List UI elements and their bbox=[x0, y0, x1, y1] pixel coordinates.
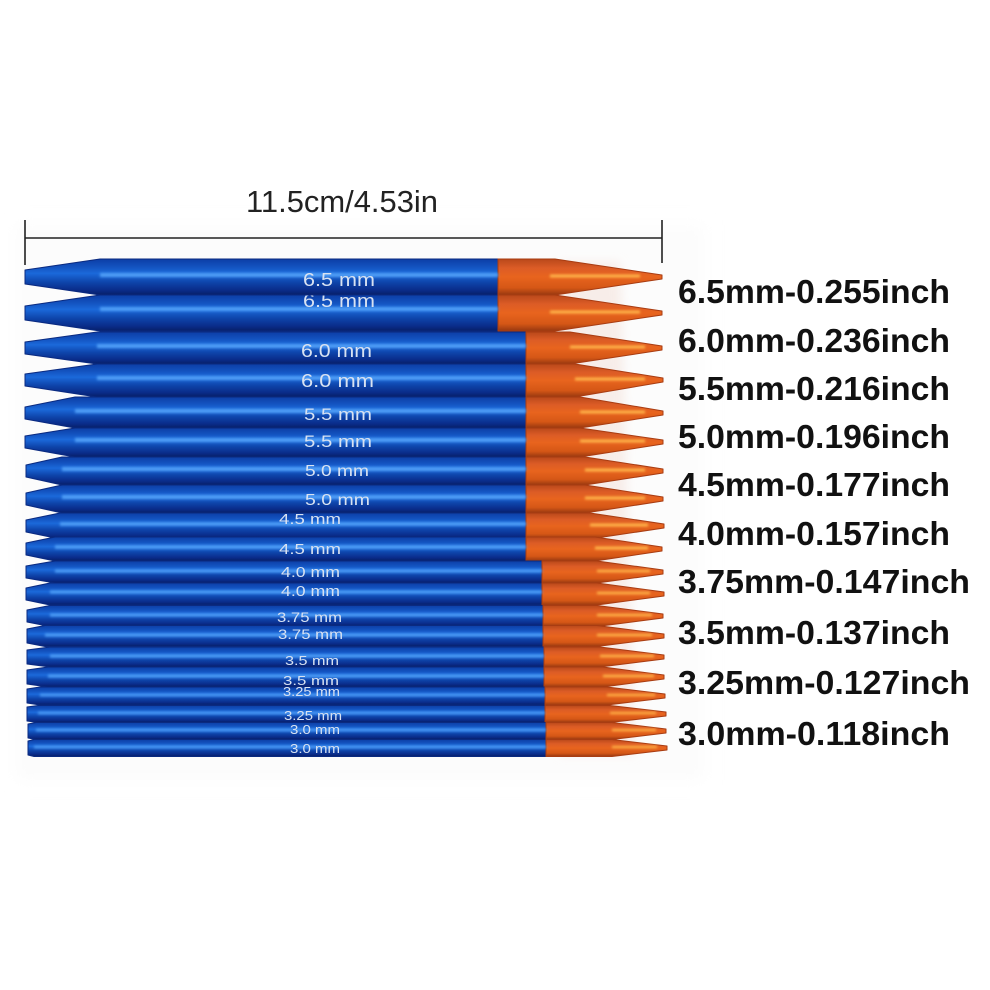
dimension label: 11.5cm/4.53in bbox=[246, 184, 438, 219]
size conversion labels: 3.75mm-0.147inch bbox=[678, 563, 970, 600]
needle group: 3.0 mm pair: 3.0 mm bbox=[290, 723, 340, 737]
needle group: 4.0 mm pair: 4.0 mm bbox=[281, 584, 340, 600]
needle group: 5.5 mm pair bbox=[25, 397, 663, 457]
needle group: 3.5 mm pair bbox=[27, 647, 664, 688]
size conversion labels: 4.5mm-0.177inch bbox=[678, 466, 950, 503]
needle group: 3.75 mm pair: 3.75 mm bbox=[277, 610, 342, 625]
needle group: 3.25 mm pair: 3.25 mm bbox=[283, 684, 340, 699]
needle group: 3.25 mm pair bbox=[27, 684, 666, 723]
size conversion labels: 3.0mm-0.118inch bbox=[678, 715, 950, 752]
dimension line bbox=[25, 220, 662, 265]
needle group: 6.5 mm pair bbox=[25, 259, 662, 331]
needle group: 3.0 mm pair bbox=[28, 722, 667, 756]
size conversion labels: 3.5mm-0.137inch bbox=[678, 614, 950, 651]
tip shadow bbox=[560, 262, 635, 755]
needle group: 5.0 mm pair: 5.0 mm bbox=[305, 463, 369, 480]
needle group: 6.5 mm pair: 6.5 mm bbox=[303, 291, 375, 311]
needle group: 5.5 mm pair: 5.5 mm bbox=[304, 433, 372, 451]
needle group: 3.75 mm pair bbox=[27, 606, 664, 646]
needle group: 4.5 mm pair: 4.5 mm bbox=[279, 511, 341, 528]
needle group: 6.0 mm pair bbox=[25, 332, 663, 397]
needle group: 5.0 mm pair bbox=[26, 457, 663, 513]
size conversion labels: 6.5mm-0.255inch bbox=[678, 273, 950, 310]
size conversion labels bbox=[678, 273, 970, 752]
size conversion labels: 5.5mm-0.216inch bbox=[678, 370, 950, 407]
needle group: 4.5 mm pair: 4.5 mm bbox=[279, 541, 341, 558]
photo backdrop bbox=[15, 225, 705, 780]
size conversion labels: 5.0mm-0.196inch bbox=[678, 418, 950, 455]
needle group: 3.0 mm pair: 3.0 mm bbox=[290, 742, 340, 756]
needle group: 3.5 mm pair: 3.5 mm bbox=[285, 653, 339, 668]
needle group: 3.5 mm pair: 3.5 mm bbox=[283, 673, 339, 688]
needle group: 3.75 mm pair: 3.75 mm bbox=[278, 627, 343, 642]
size conversion labels: 6.0mm-0.236inch bbox=[678, 322, 950, 359]
size conversion labels: 4.0mm-0.157inch bbox=[678, 515, 950, 552]
needle group: 6.0 mm pair: 6.0 mm bbox=[301, 371, 374, 391]
needle group: 6.0 mm pair: 6.0 mm bbox=[301, 341, 372, 361]
needle group: 5.0 mm pair: 5.0 mm bbox=[305, 492, 370, 509]
size conversion labels: 3.25mm-0.127inch bbox=[678, 664, 970, 701]
needle group: 5.5 mm pair: 5.5 mm bbox=[304, 406, 372, 424]
needle group: 4.0 mm pair bbox=[26, 561, 664, 605]
needle group: 4.5 mm pair bbox=[26, 511, 664, 561]
needle group: 6.5 mm pair: 6.5 mm bbox=[303, 270, 375, 290]
needle group: 3.25 mm pair: 3.25 mm bbox=[284, 708, 342, 723]
needle group: 4.0 mm pair: 4.0 mm bbox=[281, 565, 340, 581]
